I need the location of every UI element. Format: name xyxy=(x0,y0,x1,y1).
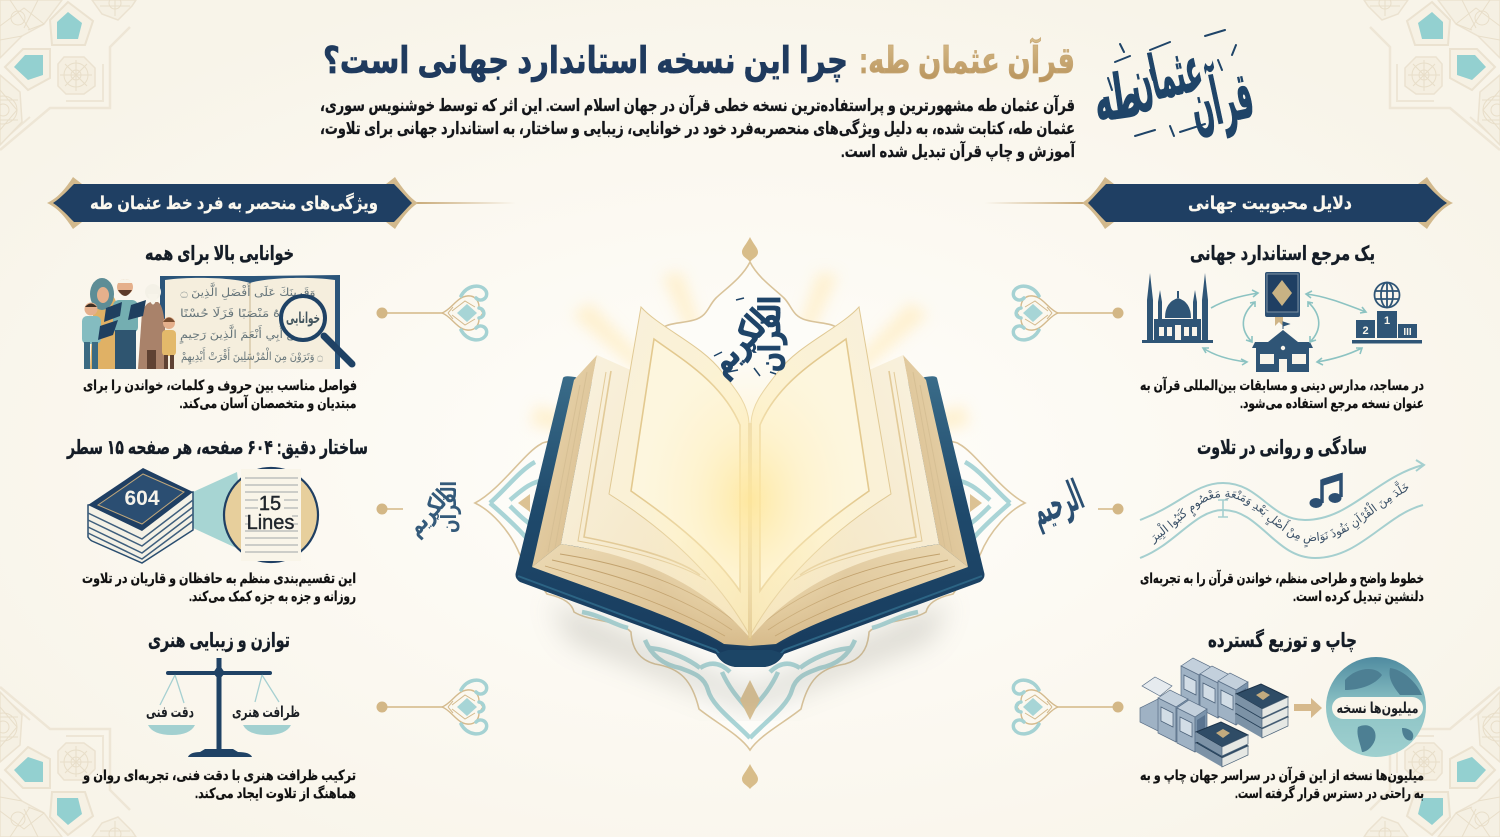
icon: globe and podium xyxy=(1352,282,1422,344)
connector: left middle with calligraphy xyxy=(376,481,461,541)
corner ornament: top right xyxy=(1364,0,1500,150)
logo calligraphy: Quran Uthman Taha: عثمان xyxy=(1124,36,1208,117)
ornament drops xyxy=(742,237,758,789)
icon: flowing ribbon with text xyxy=(1140,459,1426,559)
icon: school xyxy=(1252,322,1313,372)
icon: globe with label xyxy=(1326,657,1426,757)
icon: globe with label: میلیون‌ها نسخه xyxy=(1336,700,1418,717)
icon: globe and podium: 1 xyxy=(1384,315,1390,327)
icon: open book and magnifier: وَقَرِينَكَ عَلَى أَفْضَلِ الَّذِينَ ۝ xyxy=(181,282,316,301)
banner: right section heading xyxy=(984,177,1453,229)
seal: Al-Quran Al-Karim: الكريم xyxy=(702,303,779,383)
connector: left top xyxy=(376,286,487,340)
title: چرا این نسخه استاندارد جهانی است؟ xyxy=(323,40,848,82)
panel: wide printing and distribution xyxy=(1140,628,1426,802)
intro paragraph xyxy=(320,94,1076,162)
panel: balance and artistic beauty: هماهنگ از تلاوت ایجاد می‌کند. xyxy=(195,785,356,802)
icon: mosque xyxy=(1142,273,1213,343)
panel: precise structure xyxy=(66,437,368,605)
icon: stacks of books xyxy=(1196,684,1288,767)
logo calligraphy: Quran Uthman Taha: قرآن xyxy=(1183,54,1260,144)
title: قرآن عثمان طه: xyxy=(859,37,1075,82)
connector: left bottom xyxy=(376,680,487,734)
corner ornament: bottom left xyxy=(0,687,136,837)
icon: 15 lines circle: Lines xyxy=(247,512,294,534)
connector: left middle with calligraphy: القرآن xyxy=(435,481,461,533)
panel: wide printing and distribution: به راحتی در دسترس قرار گرفته است. xyxy=(1235,785,1424,802)
heading: ساختار دقیق: ۶۰۴ صفحه، هر صفحه ۱۵ سطر xyxy=(66,437,368,459)
icon: Quran book xyxy=(1265,272,1300,326)
body text: در مساجد، مدارس دینی و مسابقات بین‌المللی قرآن به xyxy=(1140,376,1424,394)
light rays xyxy=(530,272,970,470)
icon: book stack 604 xyxy=(88,468,247,563)
icon: open book and magnifier: خوانایی xyxy=(286,310,320,327)
heading: توازن و زیبایی هنری xyxy=(148,630,290,652)
left half of book xyxy=(516,307,750,667)
connector: right top xyxy=(1013,286,1124,340)
heading: چاپ و توزیع گسترده xyxy=(1208,628,1357,653)
panel: global standard reference xyxy=(1140,243,1424,412)
icon: balance scale: ظرافت هنری xyxy=(232,704,300,721)
icon: open book and magnifier: مَعَقَ أَبِي أَنْعَمَ الَّذِينَ رَحِيمٍ xyxy=(179,324,310,344)
seal: Al-Quran Al-Karim: القرآن xyxy=(751,296,787,372)
icon: flowing ribbon with text: خَلَّدَ مِنَ الْقُرْآنِ نَفُوذَ نَوَاضٍ مِنْ أَصْلٍ بَعْدِ وَمَنْعَةِ مَعْصُومٍ كَتَبُوا الْبِيرَ xyxy=(1152,480,1408,548)
heading: سادگی و روانی در تلاوت xyxy=(1197,435,1367,459)
icon: balance scale xyxy=(146,658,300,757)
body text: این تقسیم‌بندی منظم به حافظان و قاریان در تلاوت xyxy=(82,570,356,587)
panel: high readability: مبتدیان و متخصصان آسان می‌کند. xyxy=(180,394,356,412)
icon: open book and magnifier xyxy=(160,275,352,369)
banner: left section heading xyxy=(47,177,516,229)
corner ornament: bottom right xyxy=(1364,687,1500,837)
logo calligraphy: Quran Uthman Taha: طه xyxy=(1090,60,1145,134)
book shadow xyxy=(550,600,950,710)
intro paragraph: عثمان طه، کتابت شده، به دلیل ویژگی‌های منحصربه‌فرد خود در خوانایی، زیبایی و ساختار، به استاندارد جهانی برای تلاوت، xyxy=(320,118,1075,139)
connector: left middle with calligraphy: الكريم xyxy=(401,485,456,541)
logo calligraphy: Quran Uthman Taha xyxy=(1090,30,1260,144)
panel: simplicity and flow in recitation xyxy=(1140,435,1426,605)
icon: globe and podium: 2 xyxy=(1362,325,1369,337)
icon: 15 lines circle xyxy=(224,468,318,562)
panel: high readability xyxy=(82,243,357,412)
icon: 15 lines circle: 15 xyxy=(259,493,281,515)
icon: globe and podium: III xyxy=(1403,327,1412,338)
icon: balance scale: دقت فنی xyxy=(146,704,194,721)
icon: open book and magnifier: آتَيْنَاهُ مَنْصَبًا فَزَلَا حُسْنًا xyxy=(180,306,301,320)
arrow xyxy=(1294,698,1322,718)
icon: open book and magnifier: ۝ وَتَرَوْنَ مِنَ الْمُرْسَلِينَ أَقْرَتْ أَيْدِيهِمْ xyxy=(181,347,323,365)
icon: family group reading xyxy=(82,278,176,369)
body text: فواصل مناسب بین حروف و کلمات، خواندن را برای xyxy=(83,377,357,394)
panel: precise structure: روزانه و جزه به جزه کمک می‌کند. xyxy=(189,588,356,605)
corner ornament: top left xyxy=(0,0,136,150)
intro paragraph: آموزش و چاپ قرآن تبدیل شده است. xyxy=(841,140,1076,162)
banner: right section heading: دلایل محبوبیت جهانی xyxy=(1188,193,1352,214)
panel: balance and artistic beauty xyxy=(82,630,356,802)
banner: left section heading: ویژگی‌های منحصر به فرد خط عثمان طه xyxy=(90,192,378,214)
body text: ترکیب ظرافت هنری با دقت فنی، تجربه‌ای روان و xyxy=(82,767,356,784)
ornament medallion xyxy=(475,262,1025,750)
intro paragraph: قرآن عثمان طه مشهورترین و پراستفاده‌ترین نسخه خطی قرآن در جهان اسلام است. این اثر که توسط خوشنویس سوری، xyxy=(320,94,1075,116)
central open book with ornament xyxy=(475,237,1025,789)
heading: خوانایی بالا برای همه xyxy=(145,243,294,265)
connector: right middle with calligraphy: الرحیم xyxy=(1024,473,1090,536)
panel: global standard reference: عنوان نسخه مرجع استفاده می‌شود. xyxy=(1240,395,1424,412)
icon: printing presses xyxy=(1140,658,1248,752)
icon: book stack 604: 604 xyxy=(124,487,160,510)
panel: simplicity and flow in recitation: دلنشین تبدیل کرده است. xyxy=(1293,588,1424,605)
centre glow xyxy=(640,350,860,650)
heading: یک مرجع استاندارد جهانی xyxy=(1190,243,1375,265)
body text: میلیون‌ها نسخه از این قرآن در سراسر جهان چاپ و به xyxy=(1140,766,1424,784)
connector: right bottom xyxy=(1013,680,1124,734)
arrows between icons xyxy=(1203,290,1366,365)
